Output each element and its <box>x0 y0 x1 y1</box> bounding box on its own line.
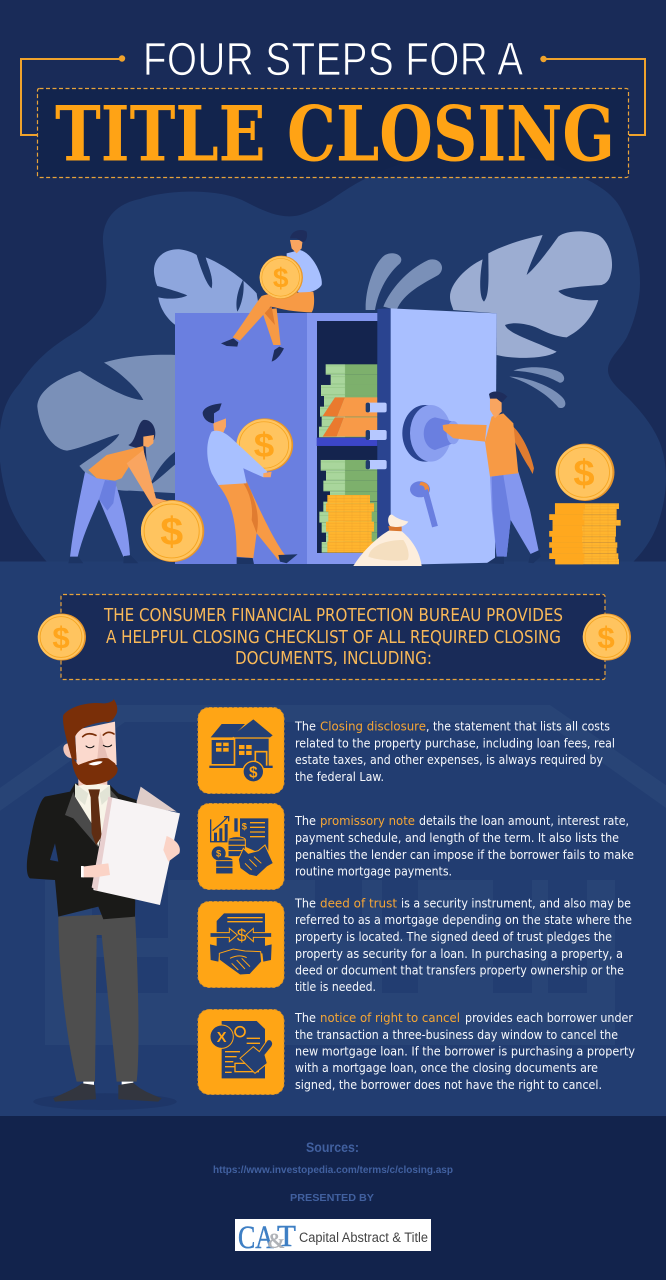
bracket: right <box>540 56 645 135</box>
text block: deed of trust: title is needed. <box>295 979 376 994</box>
title line one: FOUR STEPS FOR A <box>143 35 524 86</box>
text block: promissory note: payment schedule, and length of the term. It also lists the <box>295 830 619 845</box>
text block: notice of right to cancel: notice of right to cancel <box>320 1010 460 1025</box>
text block: deed of trust <box>294 896 632 994</box>
background blob behind illustration <box>0 156 666 562</box>
title block <box>21 35 645 179</box>
logo: CA <box>238 1220 274 1256</box>
sources heading: Sources: <box>306 1139 359 1155</box>
coin: left: $ <box>52 620 70 655</box>
icon: deed of trust: $ <box>237 926 247 946</box>
callout text: DOCUMENTS, INCLUDING: <box>235 649 432 669</box>
text block: notice of right to cancel: new mortgage loan. If the borrower is purchasing a property <box>295 1044 636 1058</box>
text block: closing disclosure: the federal Law. <box>295 769 384 784</box>
text block: notice of right to cancel: signed, the borrower does not have the right to cancel. <box>295 1077 602 1092</box>
callout text: THE CONSUMER FINANCIAL PROTECTION BUREAU PROVIDES <box>103 606 563 626</box>
text block: promissory note: promissory note <box>320 813 415 828</box>
safe door <box>366 308 497 565</box>
icon: notice of right to cancel <box>198 1010 284 1094</box>
coin <box>141 500 204 562</box>
money: lower stack <box>319 460 377 553</box>
coin: $ <box>254 426 274 465</box>
icon: promissory note <box>198 804 284 890</box>
coin stack <box>549 503 621 564</box>
text block: promissory note: details the loan amount, interest rate, <box>419 813 629 828</box>
panel: lower section background <box>0 562 666 1116</box>
door handle <box>410 481 435 527</box>
intro callout <box>38 594 631 680</box>
door bolts <box>366 403 387 469</box>
text block: closing disclosure <box>294 718 615 784</box>
text block: notice of right to cancel: the transaction a three-business day window to cancel the <box>295 1027 618 1042</box>
leaf: lower left <box>37 355 177 493</box>
leaf: upper left <box>154 249 260 325</box>
text block: closing disclosure: Closing disclosure <box>320 718 426 734</box>
callout box <box>61 594 605 680</box>
text block: deed of trust: is a security instrument, and also may be <box>401 896 631 910</box>
panel: footer <box>0 1116 666 1280</box>
text block: deed of trust: The <box>294 896 316 910</box>
text block: closing disclosure: , the statement that lists all costs <box>426 718 610 734</box>
coin: right: $ <box>597 620 615 655</box>
coin: $ <box>573 452 595 493</box>
text block: deed of trust: property as security for a loan. In purchasing a property, a <box>295 946 623 961</box>
beard <box>72 757 118 785</box>
safe shelf <box>317 438 377 446</box>
background: top section <box>0 0 666 563</box>
bracket: left <box>21 55 125 135</box>
money: upper stack <box>319 364 377 437</box>
text block: notice of right to cancel: with a mortgage loan, once the closing documents are <box>295 1060 598 1075</box>
illustration: safe and people <box>37 230 621 566</box>
leaves: small sprigs <box>366 253 565 408</box>
icon: closing disclosure: $ <box>249 764 258 781</box>
person: woman sitting on safe with coin <box>221 230 322 362</box>
coin stack inside safe <box>326 495 375 553</box>
text block: closing disclosure: estate taxes, and other expenses, is always required by <box>295 752 604 767</box>
text block: promissory note: penalties the lender can impose if the borrower fails to make <box>295 847 634 862</box>
text block: deed of trust: property is located. The signed deed of trust pledges the <box>295 929 612 944</box>
person: woman pushing coin <box>68 420 204 563</box>
coin: left <box>38 614 86 660</box>
icon: promissory note: $ <box>216 849 222 859</box>
presented by: PRESENTED BY <box>290 1192 374 1204</box>
safe body <box>175 313 379 564</box>
logo: & <box>267 1228 285 1253</box>
orange bundles <box>323 397 377 437</box>
eyes and brows <box>83 732 114 748</box>
icon: notice of right to cancel: X <box>217 1030 227 1046</box>
text block: promissory note <box>294 813 634 878</box>
callout text <box>103 606 563 669</box>
coin: $ <box>273 262 289 293</box>
coin <box>236 418 293 472</box>
document <box>92 787 180 905</box>
text block: deed of trust: referred to as a mortgage depending on the state where the <box>295 912 632 927</box>
text block: notice of right to cancel: provides each borrower under <box>465 1010 634 1025</box>
person: man carrying coin <box>203 403 298 564</box>
text block: notice of right to cancel <box>294 1010 636 1092</box>
icon: deed of trust <box>198 902 284 988</box>
coin pile and coin at right <box>549 444 621 564</box>
text block: promissory note: The <box>294 813 316 828</box>
icon: closing disclosure <box>198 708 284 794</box>
logo: T <box>277 1218 296 1253</box>
text block: deed of trust: deed of trust <box>320 896 397 910</box>
coin: $ <box>160 509 183 554</box>
text block: deed of trust: deed or document that transfers property ownership or the <box>295 962 624 978</box>
source url: https://www.investopedia.com/terms/c/closing.asp <box>213 1164 453 1176</box>
title box <box>38 88 628 178</box>
icon: promissory note: $ <box>242 821 248 831</box>
coin: right <box>583 614 631 660</box>
businessman reading document <box>27 698 180 1110</box>
person: man turning dial <box>443 391 541 564</box>
logo <box>235 1218 431 1256</box>
text block: closing disclosure: related to the property purchase, including loan fees, real <box>295 736 615 750</box>
hands <box>81 836 180 877</box>
hair <box>63 698 117 760</box>
safe contents <box>317 364 377 553</box>
leaf: right <box>450 231 612 358</box>
callout text: A HELPFUL CLOSING CHECKLIST OF ALL REQUIRED CLOSING <box>106 628 561 648</box>
door dial <box>402 405 460 462</box>
logo: Capital Abstract & Title <box>299 1230 428 1245</box>
text block: notice of right to cancel: The <box>294 1010 316 1025</box>
text block: promissory note: routine mortgage payments. <box>295 864 452 878</box>
text block: closing disclosure: The <box>294 718 316 734</box>
money bag <box>353 515 422 566</box>
